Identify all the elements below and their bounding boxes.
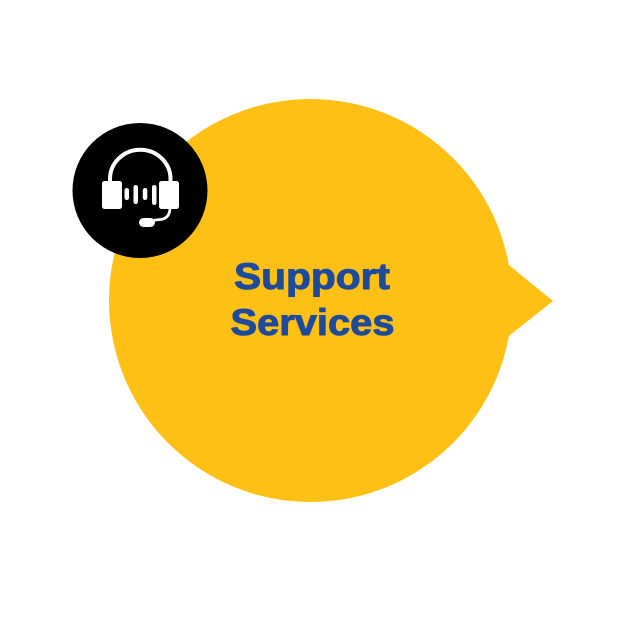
heading: Support Services: Services: [230, 302, 394, 343]
speech bubble: yellow circle with right pointer: [109, 99, 553, 502]
microphone boom: [150, 209, 170, 221]
icon: headset on black circle: [72, 123, 208, 258]
right ear cup: [159, 181, 179, 209]
sound wave bars: [124, 185, 156, 205]
heading: Support Services: Support: [234, 256, 390, 297]
heading: Support Services: [230, 256, 394, 343]
left ear cup: [102, 181, 122, 209]
microphone tip: [139, 218, 155, 227]
headband: [110, 150, 170, 182]
